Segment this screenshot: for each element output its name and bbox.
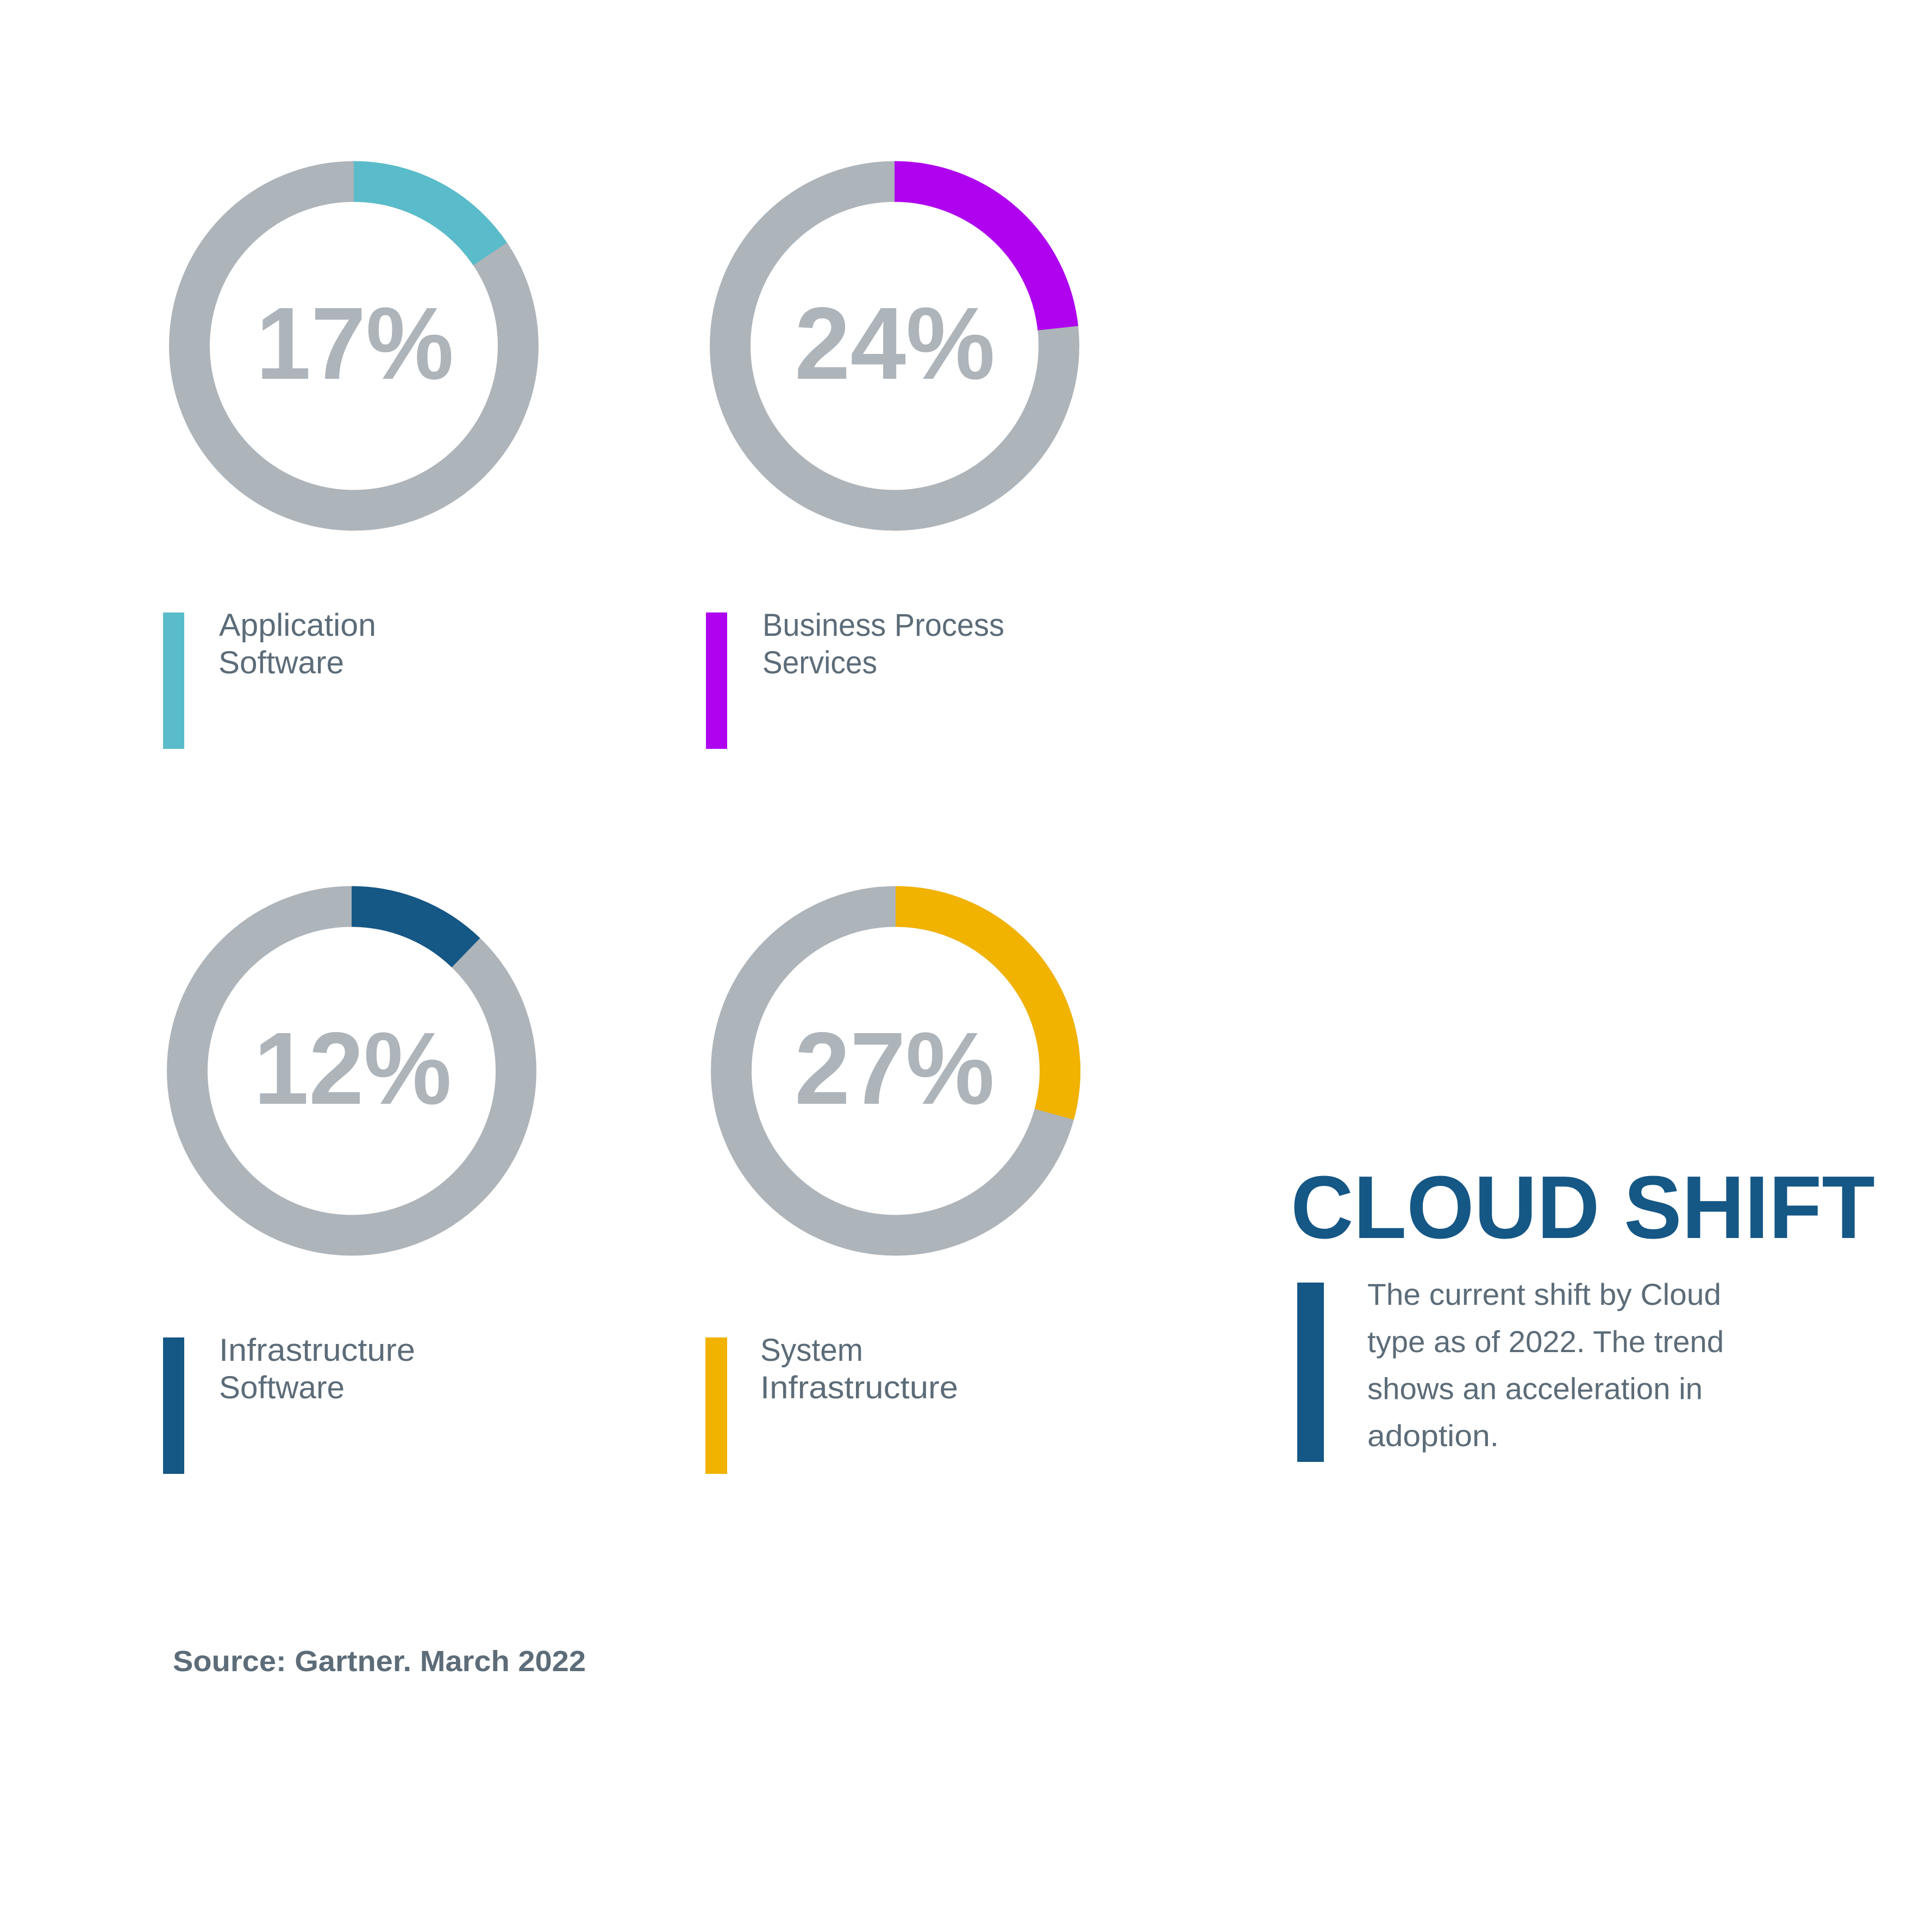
text block: description: The current shift by Cloud bbox=[1367, 1277, 1721, 1311]
label: infrastructure software bbox=[219, 1333, 415, 1405]
panel: application software bbox=[163, 182, 518, 749]
label: application software: Software bbox=[218, 645, 344, 680]
label: business process services: Services bbox=[762, 645, 877, 680]
accent bar: description bbox=[1297, 1283, 1324, 1462]
label: application software bbox=[218, 608, 376, 680]
label: business process services: Business Process bbox=[762, 608, 1004, 643]
label: application software: Application bbox=[219, 608, 376, 643]
text block: description bbox=[1367, 1277, 1724, 1453]
text block: description: shows an acceleration in bbox=[1367, 1372, 1703, 1405]
panel: business process services bbox=[706, 182, 1059, 749]
value: 17%: 17% bbox=[256, 286, 454, 401]
donut chart: 17% bbox=[189, 182, 518, 510]
legend bar: gold bbox=[705, 1337, 727, 1474]
label: infrastructure software: Infrastructure bbox=[219, 1333, 415, 1368]
legend bar: teal bbox=[163, 612, 184, 749]
donut chart: 12% bbox=[187, 906, 516, 1235]
legend bar: purple bbox=[706, 612, 727, 749]
text block: description: adoption. bbox=[1367, 1418, 1499, 1453]
label: infrastructure software: Software bbox=[219, 1370, 345, 1405]
donut chart: 24% bbox=[730, 182, 1059, 510]
label: system infrastructure bbox=[760, 1333, 958, 1405]
label: business process services bbox=[762, 608, 1004, 680]
panel: infrastructure software bbox=[163, 906, 516, 1474]
legend bar: navy bbox=[163, 1337, 184, 1474]
source note: Source: Gartner. March 2022 bbox=[173, 1645, 586, 1678]
value: 27%: 27% bbox=[795, 1011, 995, 1126]
donut chart: 27% bbox=[731, 906, 1060, 1235]
label: system infrastructure: System bbox=[760, 1333, 863, 1368]
title: CLOUD SHIFT bbox=[1291, 1158, 1875, 1257]
panel: system infrastructure bbox=[705, 906, 1060, 1474]
label: system infrastructure: Infrastructure bbox=[760, 1370, 958, 1405]
value: 24%: 24% bbox=[795, 286, 995, 401]
text block: description: type as of 2022. The trend bbox=[1367, 1324, 1724, 1359]
value: 12%: 12% bbox=[254, 1011, 452, 1126]
